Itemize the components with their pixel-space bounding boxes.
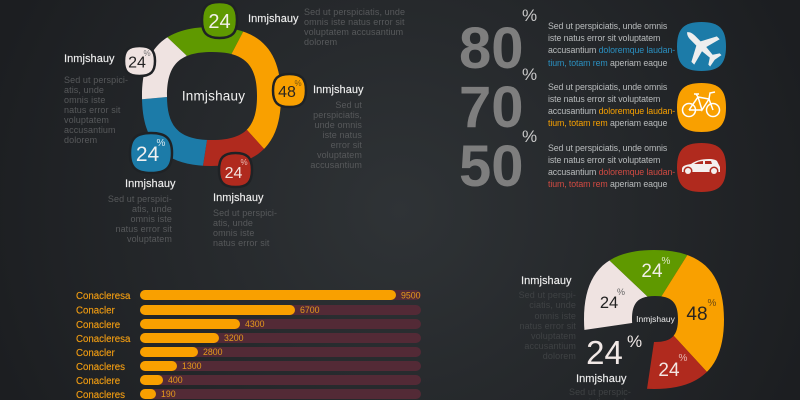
- callout: left: [64, 53, 128, 145]
- bar: Conacleresa 3200: Conacleresa: [76, 334, 131, 345]
- callout: top: Inmjshauy: [248, 13, 299, 25]
- segment value: green 24: [641, 256, 671, 282]
- callout: top: dolorem: [304, 37, 337, 47]
- callout: ring bottom: Inmjshauy: [576, 373, 627, 385]
- bar: Conacleres 1300: Conacleres: [76, 362, 125, 373]
- callout: right: Inmjshauy: [313, 84, 364, 96]
- segment value: green 24: %: [662, 256, 671, 267]
- callout: right: accusantium: [310, 160, 362, 170]
- stat: 80 percent plane: [459, 6, 729, 81]
- callout: right: error sit: [331, 140, 362, 150]
- badge: green 24: 24: [208, 11, 231, 33]
- stat: 50 percent car: tium, totam rem aperiam eaque: [548, 179, 668, 189]
- callout: right: voluptatem: [317, 150, 362, 160]
- callout: bottom right: atis, unde: [213, 218, 253, 228]
- stat: 50 percent car: iste natus error sit voluptatem: [548, 155, 660, 165]
- bar: Conacleresa 3200: [76, 333, 421, 345]
- bar: Conacleres 1300: 1300: [182, 361, 202, 371]
- segment value: white 24: [600, 287, 625, 312]
- badge: green 24: [202, 2, 237, 38]
- badge: red 24: %: [240, 158, 248, 167]
- callout: left: Inmjshauy: [64, 53, 115, 65]
- callout: left: Sed ut perspici-: [64, 75, 128, 85]
- segment value: white 24: 24: [600, 294, 618, 312]
- segment value: red 24: %: [679, 353, 688, 364]
- badge: blue 24: 24: [136, 143, 159, 166]
- stat: 70 percent bike: iste natus error sit voluptatem: [548, 94, 660, 104]
- callout: bottom right: natus error sit: [213, 238, 270, 248]
- stat: 80 percent plane: %: [522, 6, 537, 25]
- callout: right: iste natus: [322, 130, 362, 140]
- callout: bottom right: Sed ut perspici-: [213, 208, 277, 218]
- callout: right: perspiciatis,: [313, 110, 362, 120]
- bar: Conacleres 190: [76, 389, 421, 400]
- callout: top: voluptatem accusantium: [304, 27, 403, 37]
- callout: left: dolorem: [64, 135, 97, 145]
- bar: Conaclere 400: 400: [168, 375, 183, 385]
- callout: bottom left: Inmjshauy: [125, 178, 176, 190]
- panel: three-quarter ring chart: [519, 250, 724, 400]
- bar: Conaclere 400: [76, 375, 421, 387]
- callout: left: atis, unde: [64, 85, 104, 95]
- segment value: orange 48: %: [708, 298, 717, 309]
- callout: ring left: ciatis, unde: [529, 300, 576, 310]
- callout: ring bottom: Sed ut perspic-: [569, 387, 631, 397]
- stat: 80 percent plane: accusantium doloremque laudan-: [548, 45, 675, 55]
- callout: bottom left: natus error sit: [115, 224, 172, 234]
- bar: Conacler 6700: Conacler: [76, 306, 116, 316]
- callout: ring left: voluptatem: [531, 331, 576, 341]
- callout: bottom left: omnis iste: [130, 214, 172, 224]
- bar: Conaclere 4300: 4300: [245, 319, 265, 329]
- badge: orange 48: 48: [278, 84, 296, 101]
- badge: white 24: %: [143, 49, 151, 58]
- callout: bottom right: omnis iste: [213, 228, 255, 238]
- segment value: red 24: 24: [658, 360, 680, 381]
- bar: Conaclere 4300: [76, 319, 421, 331]
- bar: Conacler 2800: Conacler: [76, 348, 116, 359]
- bar: Conaclere 4300: Conaclere: [76, 320, 120, 331]
- stat: 80 percent plane: Sed ut perspiciatis, unde omnis: [548, 21, 668, 31]
- callout: ring left: Inmjshauy: [521, 275, 572, 287]
- callout: ring bottom: [569, 373, 631, 400]
- icon: plane: [674, 19, 729, 74]
- callout: ring left: accusantium: [524, 341, 576, 351]
- bar: Conacleres 1300: [76, 361, 421, 373]
- stat: 70 percent bike: accusantium doloremque laudan-: [548, 106, 675, 116]
- segment value: green 24: 24: [641, 261, 663, 282]
- panel: donut chart with callouts: [64, 0, 405, 248]
- highlight value: 24 percent: [586, 332, 642, 371]
- badge: red 24: 24: [225, 165, 242, 182]
- stat: 70 percent bike: [459, 65, 726, 140]
- stat: 50 percent car: Sed ut perspiciatis, unde omnis: [548, 143, 668, 153]
- icon: bicycle: [677, 83, 726, 132]
- donut ring: [142, 27, 281, 166]
- callout: left: voluptatem: [64, 115, 109, 125]
- segment value: red 24: [658, 353, 688, 381]
- callout: ring left: Sed ut perspi-: [519, 290, 576, 300]
- badge: white 24: 24: [128, 54, 146, 72]
- bar: Conacler 2800: 2800: [203, 347, 223, 357]
- icon: car: [677, 143, 726, 192]
- callout: right: Sed ut: [335, 100, 362, 110]
- stat: 50 percent car: [459, 127, 726, 199]
- bar: Conaclere 400: Conaclere: [76, 376, 120, 387]
- badge: blue 24: [130, 133, 172, 173]
- panel: percentage stats: [459, 6, 729, 199]
- highlight value: 24 percent: %: [627, 332, 642, 351]
- callout: left: omnis iste: [64, 95, 106, 105]
- stat: 50 percent car: %: [522, 127, 537, 146]
- stat: 50 percent car: accusantium doloremque laudan-: [548, 167, 675, 177]
- bar: Conacleres 190: 190: [161, 389, 176, 399]
- segment value: white 24: %: [617, 287, 625, 297]
- callout: top: omnis iste natus error sit: [304, 17, 405, 27]
- panel: horizontal bar chart: [76, 290, 421, 400]
- stat: 80 percent plane: iste natus error sit voluptatem: [548, 33, 660, 43]
- callout: right: [310, 84, 364, 170]
- segment value: orange 48: [686, 298, 717, 325]
- callout: top: [248, 7, 405, 47]
- callout: ring left: omnis iste: [534, 311, 576, 321]
- bar: Conacleresa 3200: 3200: [224, 333, 244, 343]
- badge: red 24: [219, 153, 252, 187]
- bar: Conacleresa 9500: 9500: [401, 290, 421, 300]
- stat: 70 percent bike: 70: [459, 75, 524, 140]
- bar: Conacleresa 9500: [76, 290, 421, 302]
- callout: bottom right: [213, 192, 277, 248]
- callout: bottom left: atis, unde: [132, 204, 172, 214]
- bar: Conacler 6700: [76, 305, 421, 316]
- badge: orange 48: %: [294, 79, 302, 88]
- bar: Conacler 6700: 6700: [300, 305, 320, 315]
- stat: 50 percent car: 50: [459, 134, 524, 199]
- callout: ring left: natus error sit: [519, 321, 576, 331]
- donut center label: Inmjshauy: [182, 88, 245, 104]
- ring segments: [584, 250, 724, 389]
- callout: bottom left: voluptatem: [127, 234, 172, 244]
- callout: bottom left: [108, 178, 176, 244]
- badge: blue 24: %: [157, 138, 166, 149]
- callout: left: natus error sit: [64, 105, 121, 115]
- bar: Conacler 2800: [76, 347, 421, 359]
- callout: top: Sed ut perspiciatis, unde: [304, 7, 405, 17]
- stat: 70 percent bike: Sed ut perspiciatis, unde omnis: [548, 82, 668, 92]
- highlight value: 24 percent: 24: [586, 334, 623, 371]
- callout: ring left: dolorem: [543, 351, 576, 361]
- callout: ring left: [519, 275, 576, 361]
- callout: right: unde omnis: [314, 120, 362, 130]
- badge: white 24: [124, 46, 155, 76]
- stat: 70 percent bike: %: [522, 65, 537, 84]
- ring center label: Inmjshauy: [636, 314, 676, 324]
- bar: Conacleresa 9500: Conacleresa: [76, 291, 131, 302]
- badge: orange 48: [273, 74, 306, 107]
- stat: 80 percent plane: tium, totam rem aperiam eaque: [548, 58, 668, 68]
- callout: left: accusantium: [64, 125, 116, 135]
- stat: 80 percent plane: 80: [459, 16, 524, 81]
- callout: bottom right: Inmjshauy: [213, 192, 264, 204]
- stat: 70 percent bike: tium, totam rem aperiam eaque: [548, 118, 668, 128]
- callout: bottom left: Sed ut perspici-: [108, 194, 172, 204]
- segment value: orange 48: 48: [686, 304, 708, 325]
